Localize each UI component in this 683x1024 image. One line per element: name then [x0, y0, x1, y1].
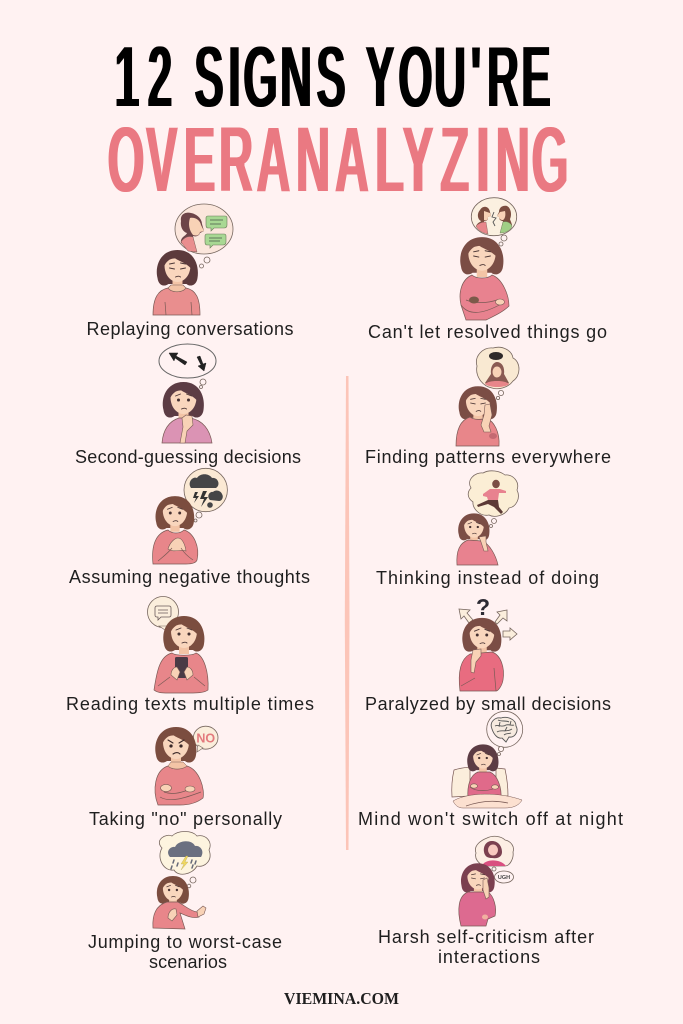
caption: Taking "no" personally — [89, 809, 282, 829]
icon: NO speech bubble — [193, 726, 218, 752]
panel: harsh self-criticism after interactions — [378, 836, 594, 967]
caption line 2: interactions — [438, 947, 540, 967]
illustration: woman reading phone — [154, 616, 208, 693]
illustration: angry woman with crossed arms — [155, 727, 203, 805]
illustration: woman resting cheek on hand — [456, 386, 499, 446]
icon: thought bubble with brain — [487, 711, 523, 756]
caption: Mind won't switch off at night — [358, 809, 623, 829]
title — [108, 27, 568, 212]
icon: thought bubble with storm clouds — [184, 468, 227, 522]
panel: replaying conversations — [86, 204, 294, 339]
caption — [378, 927, 594, 967]
caption: Second-guessing decisions — [75, 447, 301, 467]
panel: can't let resolved things go — [368, 198, 607, 342]
caption: Assuming negative thoughts — [69, 567, 310, 587]
panel: reading texts multiple times — [66, 596, 314, 714]
icon: thought bubble with arrows — [159, 344, 216, 388]
title line: 12 signs you're: 12 SIGNS YOU'RE — [115, 27, 551, 126]
icon: NO speech bubble: NO — [196, 732, 215, 746]
footer: website: VIEMINA.COM — [284, 989, 399, 1008]
illustration: woman unsure with hand on chin — [459, 618, 504, 691]
icon: cloud bubble with storm — [159, 832, 210, 888]
icon: cloud bubble with upset woman — [475, 836, 514, 871]
caption line 1: Jumping to worst-case — [88, 932, 282, 952]
panel: assuming negative thoughts — [69, 468, 310, 587]
caption: Finding patterns everywhere — [365, 447, 611, 467]
icon: question mark and arrows — [459, 594, 517, 640]
caption: Thinking instead of doing — [376, 568, 599, 588]
icon: UGH speech bubble — [494, 871, 514, 883]
caption line 1: Harsh self-criticism after — [378, 927, 594, 947]
illustration: woman looking down — [153, 250, 200, 315]
panel: taking no personally — [89, 726, 282, 829]
caption — [88, 932, 282, 972]
illustration: woman with clasped hands — [153, 496, 198, 564]
panel: finding patterns everywhere — [365, 347, 611, 467]
panel: jumping to worst-case scenarios — [88, 832, 282, 972]
caption: Can't let resolved things go — [368, 322, 607, 342]
panel: paralyzed by small decisions — [365, 594, 611, 714]
panel: thinking instead of doing — [376, 471, 599, 588]
icon: question mark and arrows: ? — [476, 594, 490, 620]
icon: thought bubble with conversation — [175, 204, 233, 268]
icon: UGH speech bubble: UGH — [498, 875, 510, 881]
caption: Paralyzed by small decisions — [365, 694, 611, 714]
caption: Replaying conversations — [86, 319, 294, 339]
panel: mind won't switch off at night — [358, 711, 623, 829]
icon: thought bubble with two people arguing — [471, 198, 517, 246]
caption: Reading texts multiple times — [66, 694, 314, 714]
title line: overanalyzing: OVERANALYZING — [108, 106, 568, 212]
panel: second-guessing decisions — [75, 344, 301, 467]
icon: cloud bubble with running figure — [468, 471, 518, 528]
illustration: woman pondering — [457, 513, 498, 565]
illustration: woman with crossed arms — [460, 237, 509, 320]
icon: cloud bubble with overwhelmed woman — [476, 347, 519, 400]
illustration: anxious woman reaching out — [153, 876, 206, 929]
illustration: woman with hand on chin — [162, 382, 212, 443]
illustration: woman with hand on face — [459, 863, 496, 926]
illustration: woman awake in bed — [452, 744, 522, 808]
icon: speech bubble with message — [148, 596, 178, 630]
caption line 2: scenarios — [149, 952, 227, 972]
